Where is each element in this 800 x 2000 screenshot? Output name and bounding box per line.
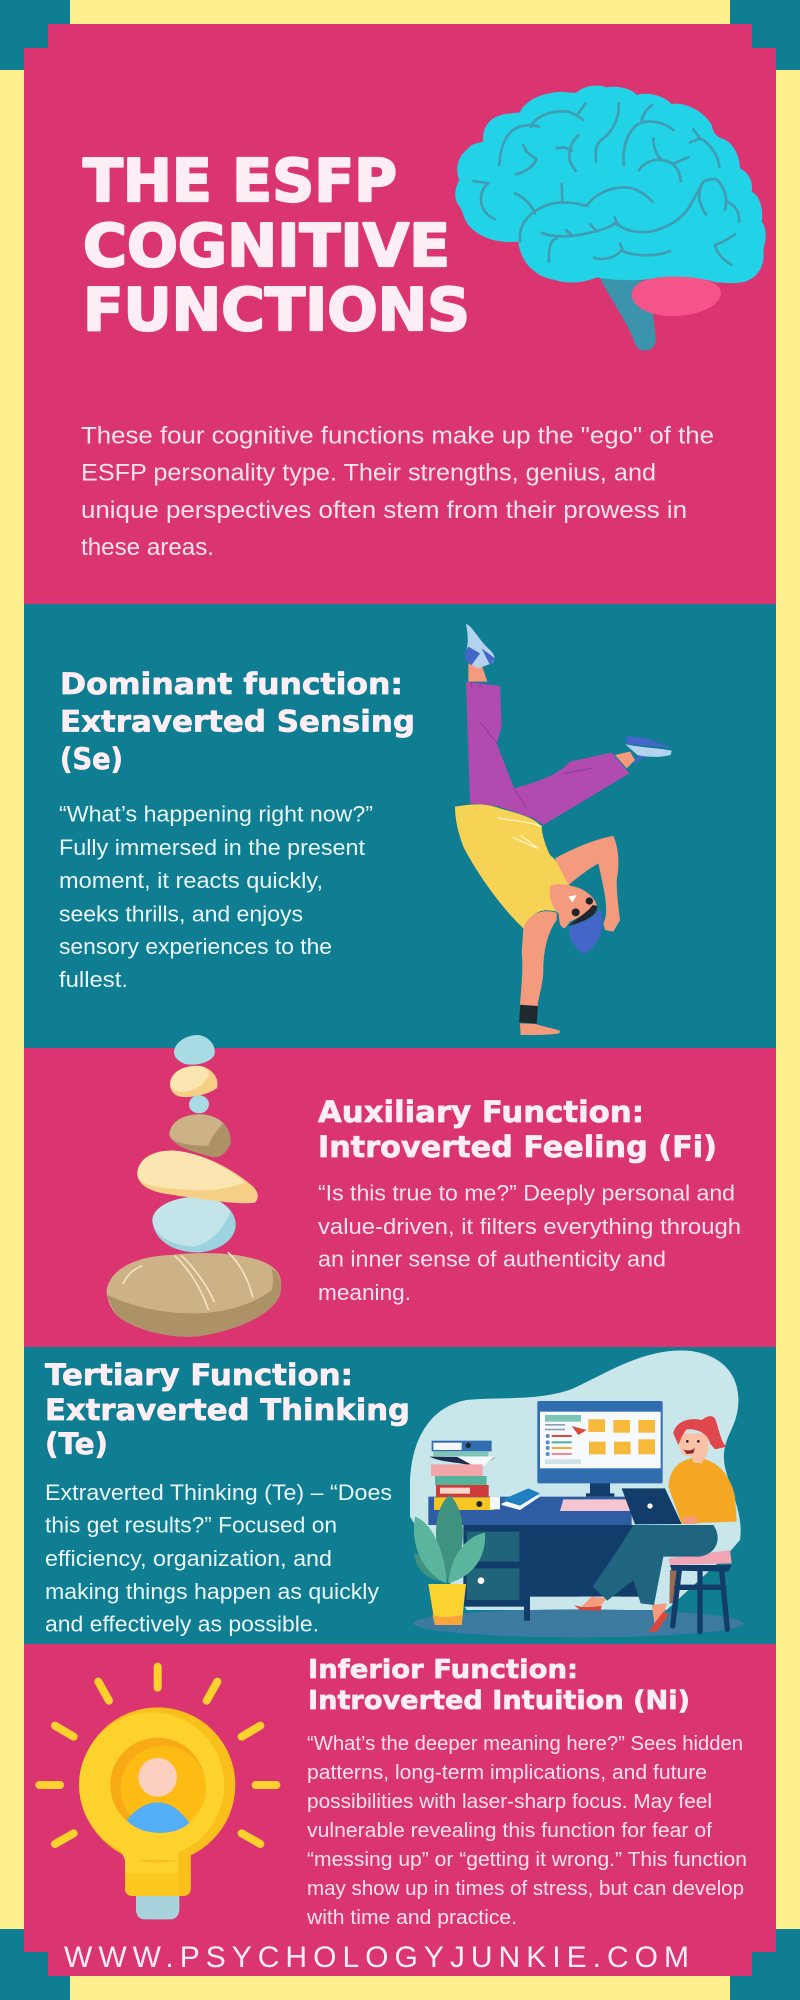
panel: inferior function xyxy=(39,1655,747,1929)
text: auxiliary function description: value-driven, it filters everything through xyxy=(318,1214,741,1239)
text: tertiary function description: Extraverted Thinking (Te) – “Does xyxy=(45,1480,392,1505)
text: dominant function description: Fully immersed in the present xyxy=(59,835,366,860)
text: inferior function description: with time and practice. xyxy=(306,1906,517,1929)
panel: auxiliary function xyxy=(107,1035,741,1337)
icon: potted plant xyxy=(414,1495,485,1625)
text: auxiliary function description: an inner sense of authenticity and xyxy=(318,1246,666,1272)
heading: tertiary function: Tertiary Function: xyxy=(45,1358,353,1392)
text: tertiary function description xyxy=(45,1480,392,1636)
heading: tertiary function: (Te) xyxy=(45,1427,108,1461)
title: THE ESFP xyxy=(83,146,397,215)
text: tertiary function description: making things happen as quickly xyxy=(45,1579,380,1604)
text: tertiary function description: efficiency, organization, and xyxy=(45,1546,332,1571)
heading: auxiliary function: Introverted Feeling (Fi) xyxy=(318,1130,717,1164)
illustration: woman at desk xyxy=(410,1351,743,1637)
intro text: these areas. xyxy=(81,534,214,561)
icon: light bulb with person xyxy=(39,1667,276,1919)
icon: brain xyxy=(455,86,766,351)
panel: tertiary function xyxy=(24,1347,776,1644)
icon: handstand dancer xyxy=(455,624,672,1035)
text: dominant function description: sensory experiences to the xyxy=(59,934,332,959)
heading: dominant function: Extraverted Sensing xyxy=(60,704,415,738)
heading: tertiary function xyxy=(45,1358,410,1461)
text: tertiary function description: and effectively as possible. xyxy=(45,1612,319,1636)
heading: auxiliary function xyxy=(318,1095,717,1164)
title: FUNCTIONS xyxy=(83,275,470,344)
intro text xyxy=(81,422,714,561)
intro text: These four cognitive functions make up the "ego" of the xyxy=(81,422,714,450)
heading: auxiliary function: Auxiliary Function: xyxy=(318,1095,644,1129)
text: auxiliary function description: “Is this true to me?” Deeply personal and xyxy=(318,1180,735,1206)
text: auxiliary function description: meaning. xyxy=(318,1280,411,1305)
text: auxiliary function description xyxy=(318,1180,741,1305)
footer: website URL: WWW.PSYCHOLOGYJUNKIE.COM xyxy=(64,1941,689,1974)
heading: dominant function: (Se) xyxy=(60,742,123,776)
text: inferior function description: vulnerable revealing this function for fear of xyxy=(307,1819,712,1842)
text: inferior function description: possibilities with laser-sharp focus. May feel xyxy=(307,1790,712,1813)
text: dominant function description: seeks thrills, and enjoys xyxy=(59,902,303,926)
text: inferior function description: “messing up” or “getting it wrong.” This function xyxy=(307,1848,747,1871)
text: inferior function description: “What’s the deeper meaning here?” Sees hidden xyxy=(307,1732,743,1755)
panel: dominant function xyxy=(24,604,776,1048)
intro text: ESFP personality type. Their strengths, genius, and xyxy=(81,460,656,486)
heading: inferior function: Introverted Intuition (Ni) xyxy=(308,1686,690,1716)
text: inferior function description: patterns, long-term implications, and future xyxy=(307,1761,707,1784)
heading: inferior function xyxy=(308,1655,690,1716)
text: tertiary function description: this get results?” Focused on xyxy=(45,1512,337,1538)
heading: inferior function: Inferior Function: xyxy=(308,1655,578,1685)
text: dominant function description xyxy=(59,802,373,992)
text: dominant function description: fullest. xyxy=(59,967,128,992)
title: COGNITIVE xyxy=(83,211,450,280)
title xyxy=(83,146,470,344)
heading: tertiary function: Extraverted Thinking xyxy=(45,1393,410,1427)
heading: dominant function: Dominant function: xyxy=(60,667,403,701)
text: inferior function description xyxy=(306,1732,747,1929)
intro text: unique perspectives often stem from their prowess in xyxy=(81,497,687,524)
text: inferior function description: may show up in times of stress, but can develop xyxy=(307,1877,744,1900)
text: dominant function description: moment, it reacts quickly, xyxy=(59,868,323,893)
icon: balanced stones xyxy=(107,1035,281,1337)
text: dominant function description: “What’s happening right now?” xyxy=(59,802,373,826)
heading: dominant function xyxy=(60,667,415,776)
